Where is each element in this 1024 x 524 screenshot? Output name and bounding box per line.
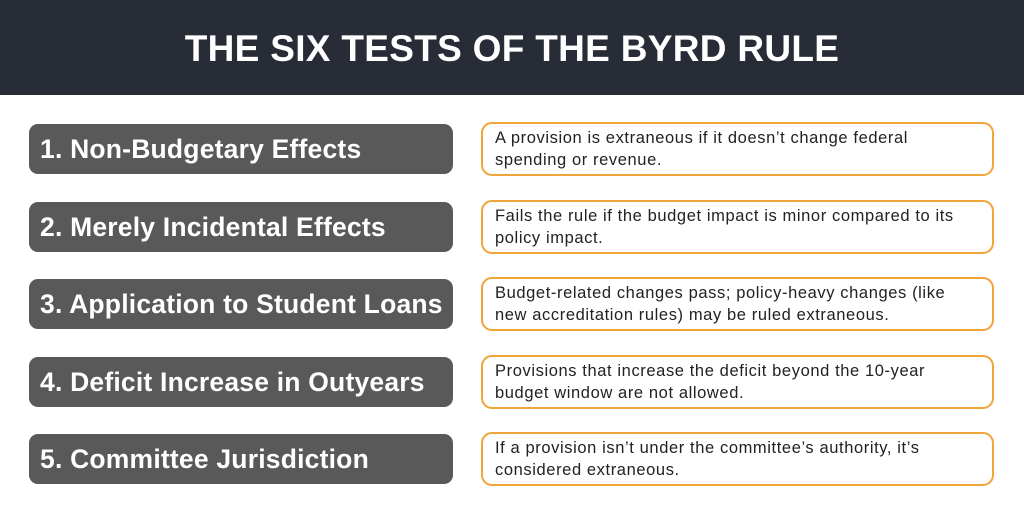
description: test 5: If a provision isn’t under the committee’s authority, it’s: [495, 439, 920, 457]
description: test 3: [481, 277, 994, 331]
label: test 5: [29, 434, 453, 484]
title: [0, 0, 1024, 95]
label: test 3: [29, 279, 453, 329]
description: test 2: policy impact.: [495, 229, 603, 247]
description: test 5: considered extraneous.: [495, 461, 680, 479]
description: test 3: Budget-related changes pass; policy-heavy changes (like: [495, 284, 945, 302]
title: THE SIX TESTS OF THE BYRD RULE: [185, 28, 839, 69]
description: test 2: [481, 200, 994, 254]
description: test 3: new accreditation rules) may be ruled extraneous.: [495, 306, 889, 324]
description: test 5: [481, 432, 994, 486]
description: test 4: [481, 355, 994, 409]
description: test 2: Fails the rule if the budget impact is minor compared to its: [495, 207, 954, 225]
description: test 4: budget window are not allowed.: [495, 384, 744, 402]
label: test 5: 5. Committee Jurisdiction: [40, 444, 369, 474]
label: test 2: 2. Merely Incidental Effects: [40, 212, 386, 242]
description: test 1: A provision is extraneous if it doesn’t change federal: [495, 129, 908, 147]
label: test 4: 4. Deficit Increase in Outyears: [40, 367, 425, 397]
description: test 4: Provisions that increase the deficit beyond the 10-year: [495, 362, 925, 380]
label: test 2: [29, 202, 453, 252]
description: test 1: [481, 122, 994, 176]
label: test 1: [29, 124, 453, 174]
label: test 4: [29, 357, 453, 407]
description: test 1: spending or revenue.: [495, 151, 662, 169]
label: test 1: 1. Non-Budgetary Effects: [40, 134, 361, 164]
label: test 3: 3. Application to Student Loans: [40, 289, 443, 319]
